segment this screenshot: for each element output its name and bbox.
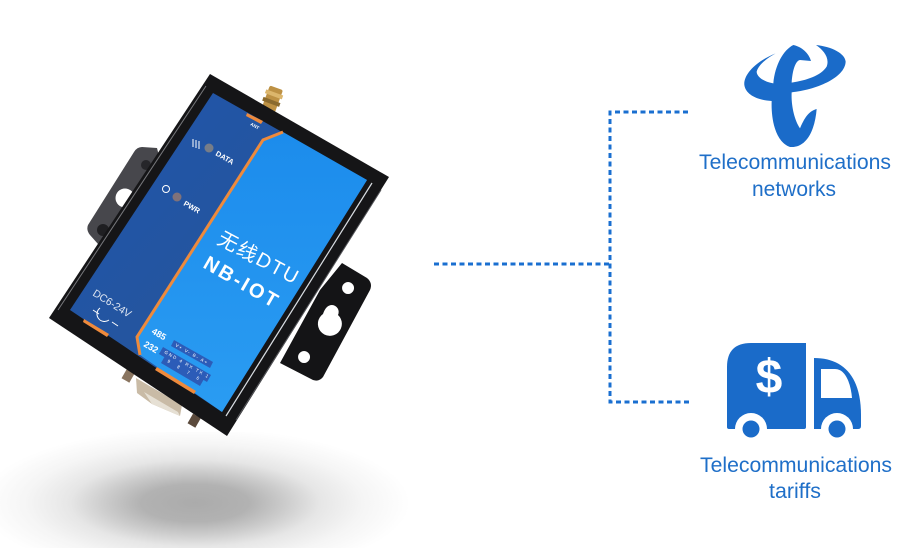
port numbers and pin labels: GND 4 RX TX 1 [164,350,210,379]
label: telecommunications networks: Telecommunications [699,151,891,174]
status indicators [162,122,260,216]
label: telecommunications tariffs: tariffs [769,480,821,503]
black metal casing [49,74,389,436]
device title [200,227,302,312]
label: telecommunications networks: networks [752,178,836,201]
dark blue panel [70,93,367,412]
label: telecommunications tariffs [700,454,892,503]
device: NB-IoT DTU [49,74,389,436]
device shadow [0,432,410,548]
port numbers and pin labels: V+ V- B- A+ [174,343,208,365]
orange tabs [83,113,263,394]
port numbers and pin labels: 9 8 7 6 [166,359,201,381]
voltage label: DC6-24V [90,287,133,320]
device title: NB-IOT [200,252,282,312]
status indicators: ANT [250,122,260,131]
status indicators: DATA [214,149,236,167]
antenna connector [259,85,285,116]
icon: truck with dollar sign: $ [756,351,783,404]
serial connector [122,369,201,428]
status indicators: PWR [182,199,202,216]
device title: 无线DTU [214,227,302,289]
icon: truck with dollar sign [727,343,861,445]
port numbers and pin labels: 232 [142,339,160,355]
right mounting bracket [280,263,371,381]
label: telecommunications networks [699,151,891,201]
light blue panel [137,132,367,412]
label: telecommunications tariffs: Telecommunications [700,454,892,477]
connector lines [434,112,690,402]
port numbers and pin labels [142,326,213,386]
port numbers and pin labels: 485 [150,326,168,342]
icon: telecom logo [744,45,846,147]
orange divider line [137,132,283,355]
left mounting bracket [87,147,160,244]
casing highlights [58,86,381,420]
